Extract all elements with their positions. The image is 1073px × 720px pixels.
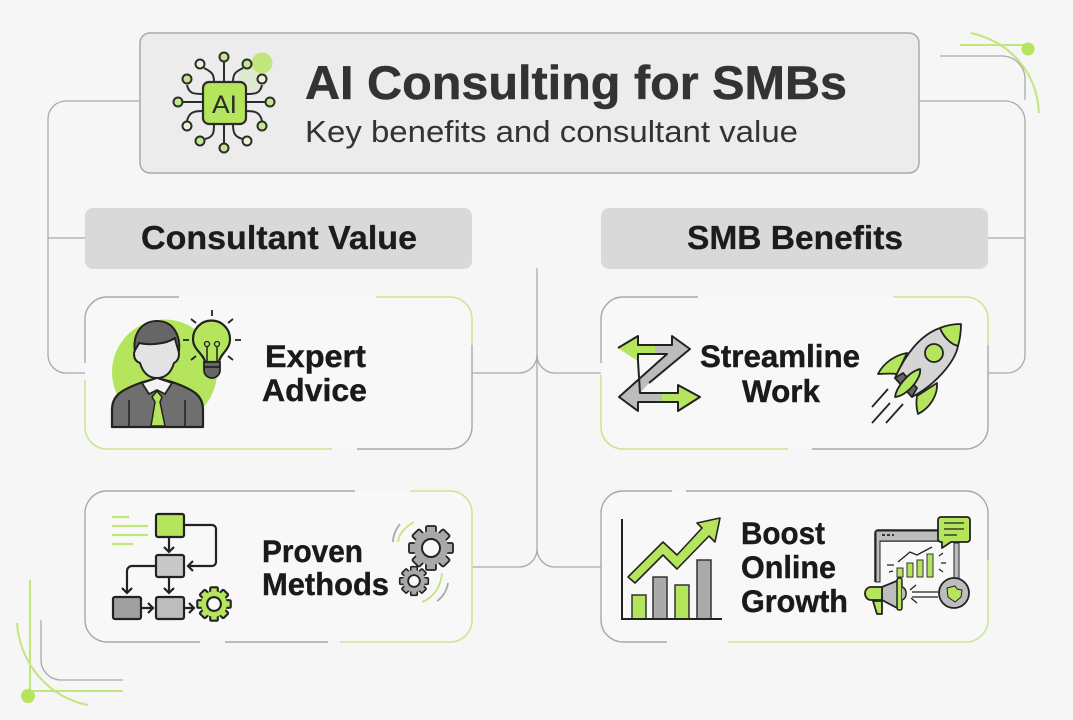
- connector lines: [48, 101, 1025, 567]
- icon: zigzag arrows: [618, 336, 700, 411]
- header panel: [140, 33, 919, 173]
- icon: flowchart: [112, 514, 231, 621]
- text: Boost Online Growth: Growth: [741, 583, 848, 619]
- text: Proven Methods: Proven: [262, 533, 363, 569]
- heading: Consultant Value: [85, 208, 472, 269]
- chart: rising bars and arrow: [622, 518, 722, 619]
- icon: gears: [393, 522, 453, 602]
- icon: AI chip: AI: [212, 91, 237, 119]
- text: Streamline Work: [700, 338, 860, 409]
- text: Proven Methods: [262, 533, 389, 602]
- heading: SMB Benefits: [601, 208, 988, 269]
- text: Streamline Work: Work: [742, 373, 820, 409]
- icon: AI chip: [174, 52, 274, 152]
- panel: Boost Online Growth: [601, 491, 988, 642]
- text: Boost Online Growth: Online: [741, 549, 836, 585]
- text: Expert Advice: [262, 338, 367, 408]
- heading: SMB Benefits: SMB Benefits: [687, 219, 903, 256]
- text: Boost Online Growth: [741, 515, 848, 619]
- text: Expert Advice: Expert: [265, 338, 367, 374]
- text: Boost Online Growth: Boost: [741, 515, 825, 551]
- text: Streamline Work: Streamline: [700, 338, 860, 374]
- heading: Consultant Value: Consultant Value: [141, 219, 417, 256]
- panel: Expert Advice: [85, 297, 472, 449]
- icon: consultant with lightbulb: [112, 310, 241, 427]
- decoration: bottom-left corner: [17, 580, 123, 705]
- text: Expert Advice: Advice: [262, 372, 367, 408]
- icon: digital marketing: [865, 517, 970, 614]
- title: AI Consulting for SMBs: [305, 56, 847, 109]
- panel: Streamline Work: [601, 297, 988, 449]
- text: Proven Methods: Methods: [262, 566, 389, 602]
- panel: Proven Methods: [85, 491, 472, 642]
- icon: rocket: [872, 324, 961, 423]
- subtitle: Key benefits and consultant value: [305, 114, 798, 149]
- decoration: top-right corner: [940, 33, 1039, 113]
